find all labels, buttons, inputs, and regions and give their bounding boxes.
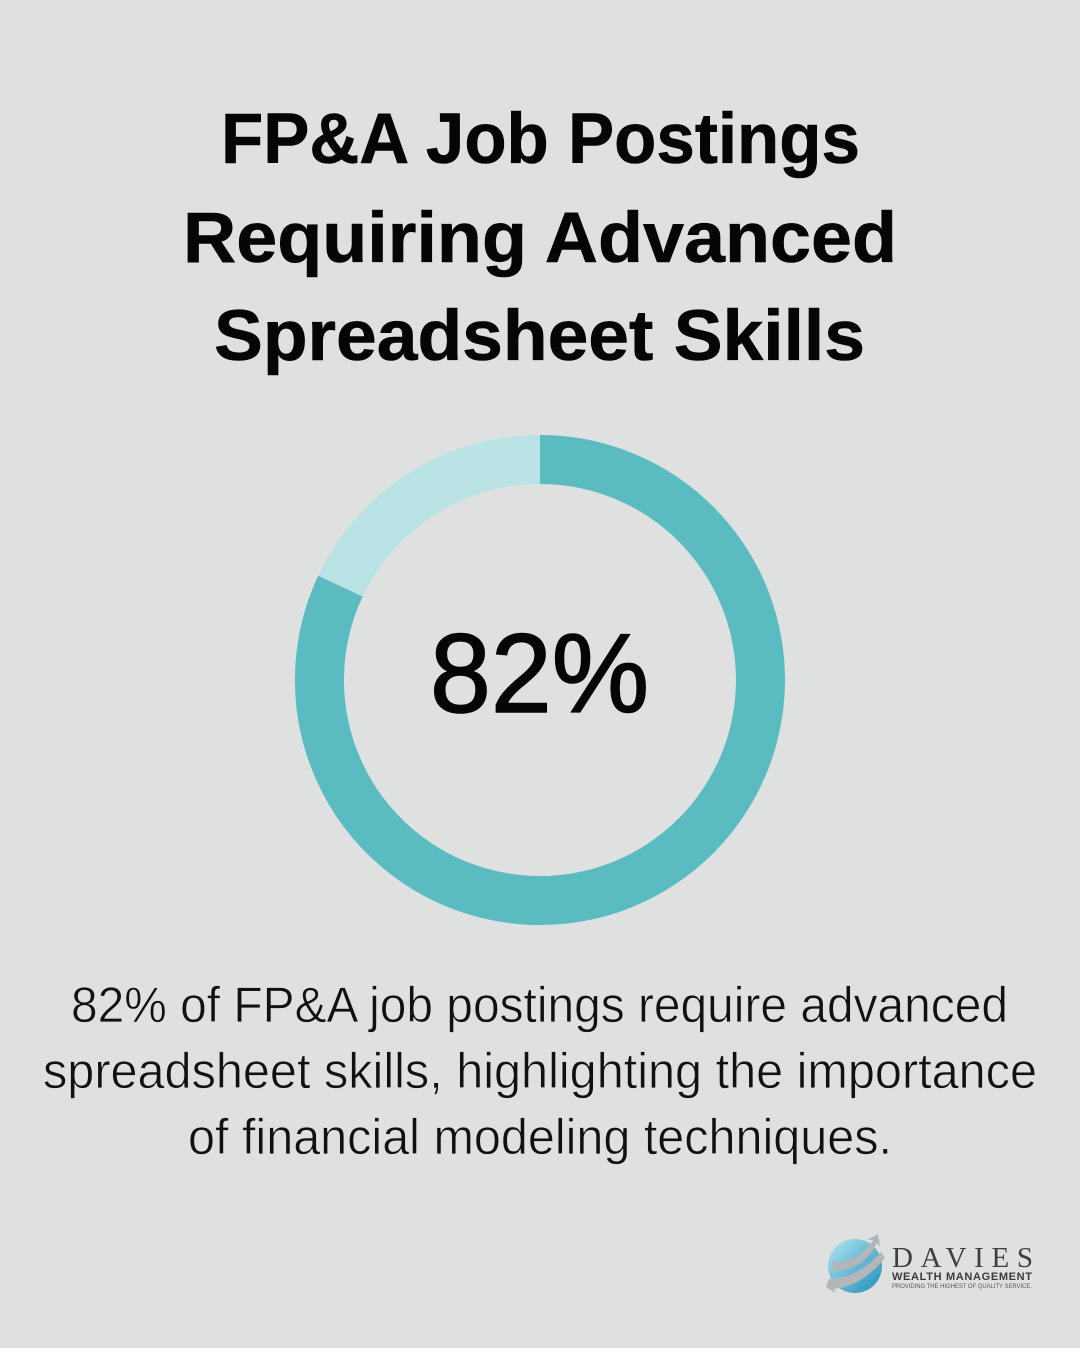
description text: of financial modeling techniques.: [188, 1109, 892, 1165]
title: FP&A Job Postings: [221, 100, 860, 179]
donut value: 82%: [430, 611, 649, 736]
logo subtitle: WEALTH MANAGEMENT: [892, 1271, 1032, 1283]
icon: globe with arrows: [826, 1234, 885, 1293]
title: [183, 100, 897, 376]
logo: Davies Wealth Management: [826, 1234, 1033, 1293]
description text: 82% of FP&A job postings require advanced: [71, 977, 1008, 1033]
title: Spreadsheet Skills: [214, 297, 865, 376]
description text: spreadsheet skills, highlighting the importance: [43, 1043, 1037, 1099]
logo tagline: PROVIDING THE HIGHEST OF QUALITY SERVICE.: [892, 1284, 1032, 1290]
donut chart: 82%: [319, 460, 760, 900]
logo wordmark: DAVIES: [892, 1242, 1033, 1274]
description text: [43, 977, 1037, 1165]
title: Requiring Advanced: [183, 199, 897, 278]
